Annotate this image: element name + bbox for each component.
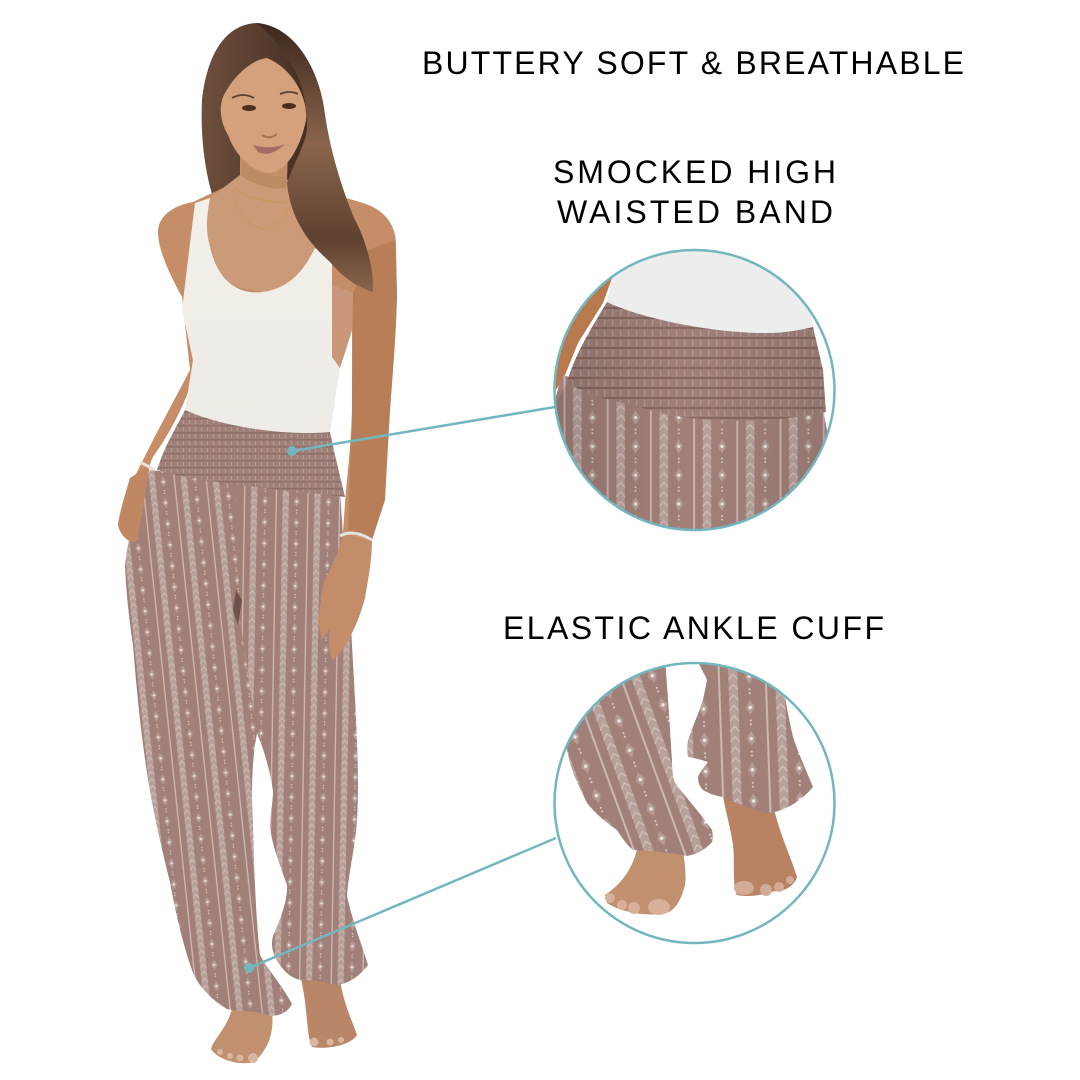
left foot close-up (605, 845, 686, 915)
right foot close-up (722, 790, 797, 896)
skirt close-up (552, 375, 830, 540)
heading: smocked waistband: SMOCKED HIGH (553, 154, 836, 190)
bodysuit close-up (607, 251, 813, 333)
smocked waistband (157, 410, 345, 497)
heading: buttery soft: BUTTERY SOFT & BREATHABLE (422, 45, 964, 81)
right cuff close-up (687, 660, 813, 813)
feet (211, 975, 357, 1063)
right hand (318, 533, 372, 660)
band shading (556, 302, 826, 516)
torso and arms skin (118, 150, 397, 542)
left hand (118, 465, 150, 542)
smocked band close-up (567, 302, 826, 421)
face (221, 58, 306, 173)
hair back (202, 23, 373, 292)
bracelets (140, 462, 372, 540)
heading: smocked waistband (553, 154, 836, 230)
white bodysuit (182, 198, 340, 433)
callout line: waistband (287, 407, 555, 456)
left toes (605, 893, 670, 915)
detail circle: smocked waistband (550, 240, 834, 540)
hair front (257, 23, 373, 292)
left cuff close-up (567, 660, 713, 856)
heading: smocked waistband: WAISTED BAND (557, 194, 833, 230)
heading: ankle cuff: ELASTIC ANKLE CUFF (503, 610, 884, 646)
side torso skin (332, 285, 353, 368)
crotch fold (233, 590, 242, 625)
callout line: ankle (244, 838, 556, 973)
left leg pants (125, 470, 292, 1016)
detail circle: ankle cuff (554, 660, 834, 943)
eyes, brows, nose and lips (232, 92, 298, 154)
necklaces (234, 187, 288, 229)
right toes (734, 876, 794, 896)
skin of arm (556, 278, 612, 390)
model figure (118, 23, 397, 1063)
infographic canvas (118, 23, 963, 1064)
right leg pants (235, 480, 368, 985)
right arm shade (348, 240, 397, 540)
chest skin (205, 175, 332, 295)
neck shade (241, 162, 287, 188)
